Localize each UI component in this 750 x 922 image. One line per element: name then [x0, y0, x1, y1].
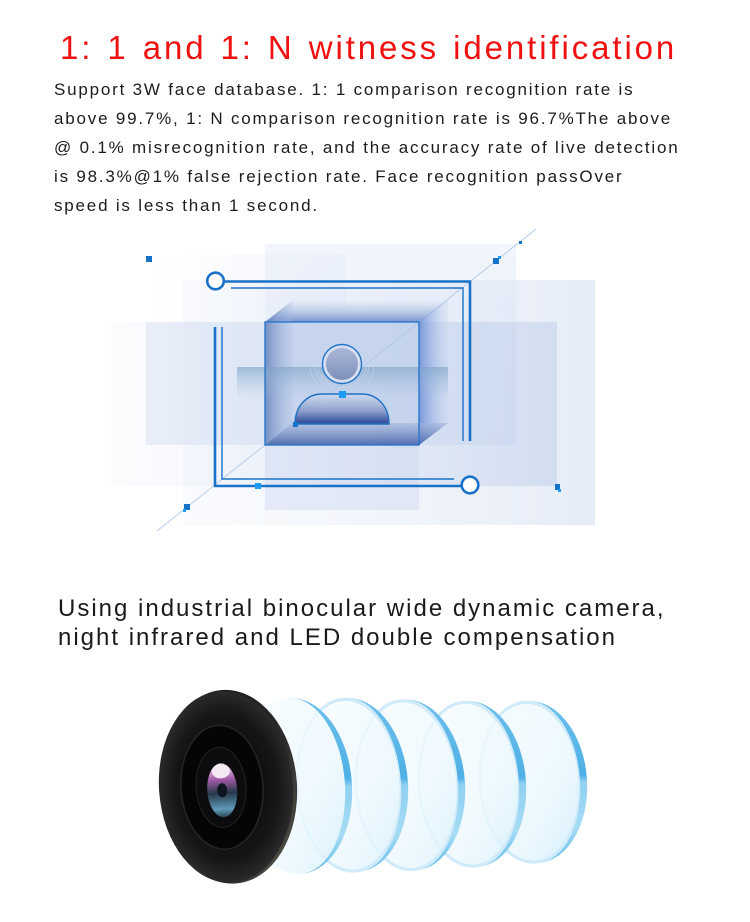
- outer frame brackets: [207, 273, 478, 493]
- black camera lens: [152, 685, 304, 888]
- 3D box interior: [237, 300, 448, 445]
- glass lens 4: [412, 697, 532, 871]
- glass lens 3: [349, 696, 471, 874]
- text block: recognition description: speed is less than 1 second.: [54, 196, 319, 215]
- text block: recognition description: above 99.7%, 1: N comparison recognition rate is 96.7%The above: [54, 109, 672, 128]
- glass lens 5: [473, 697, 593, 867]
- icon: person: [293, 332, 389, 427]
- diagonal line: [157, 229, 536, 531]
- glass lens 2: [290, 694, 414, 876]
- background layered panels: [111, 244, 595, 525]
- text block: recognition description: @ 0.1% misrecognition rate, and the accuracy rate of live detection: [54, 138, 679, 157]
- glass lens 1: [232, 694, 358, 878]
- text block: recognition description: [54, 80, 679, 215]
- text block: recognition description: is 98.3%@1% false rejection rate. Face recognition passOver: [54, 167, 623, 186]
- face recognition illustration: [146, 228, 595, 532]
- corner markers: [146, 241, 561, 512]
- title: 1: 1 and 1: N witness identification: [60, 29, 677, 66]
- subheading: [58, 595, 666, 650]
- text block: recognition description: Support 3W face database. 1: 1 comparison recognition rate is: [54, 80, 634, 99]
- camera lens illustration: [158, 690, 588, 884]
- subheading: night infrared and LED double compensation: [58, 624, 617, 650]
- subheading: Using industrial binocular wide dynamic camera,: [58, 595, 666, 622]
